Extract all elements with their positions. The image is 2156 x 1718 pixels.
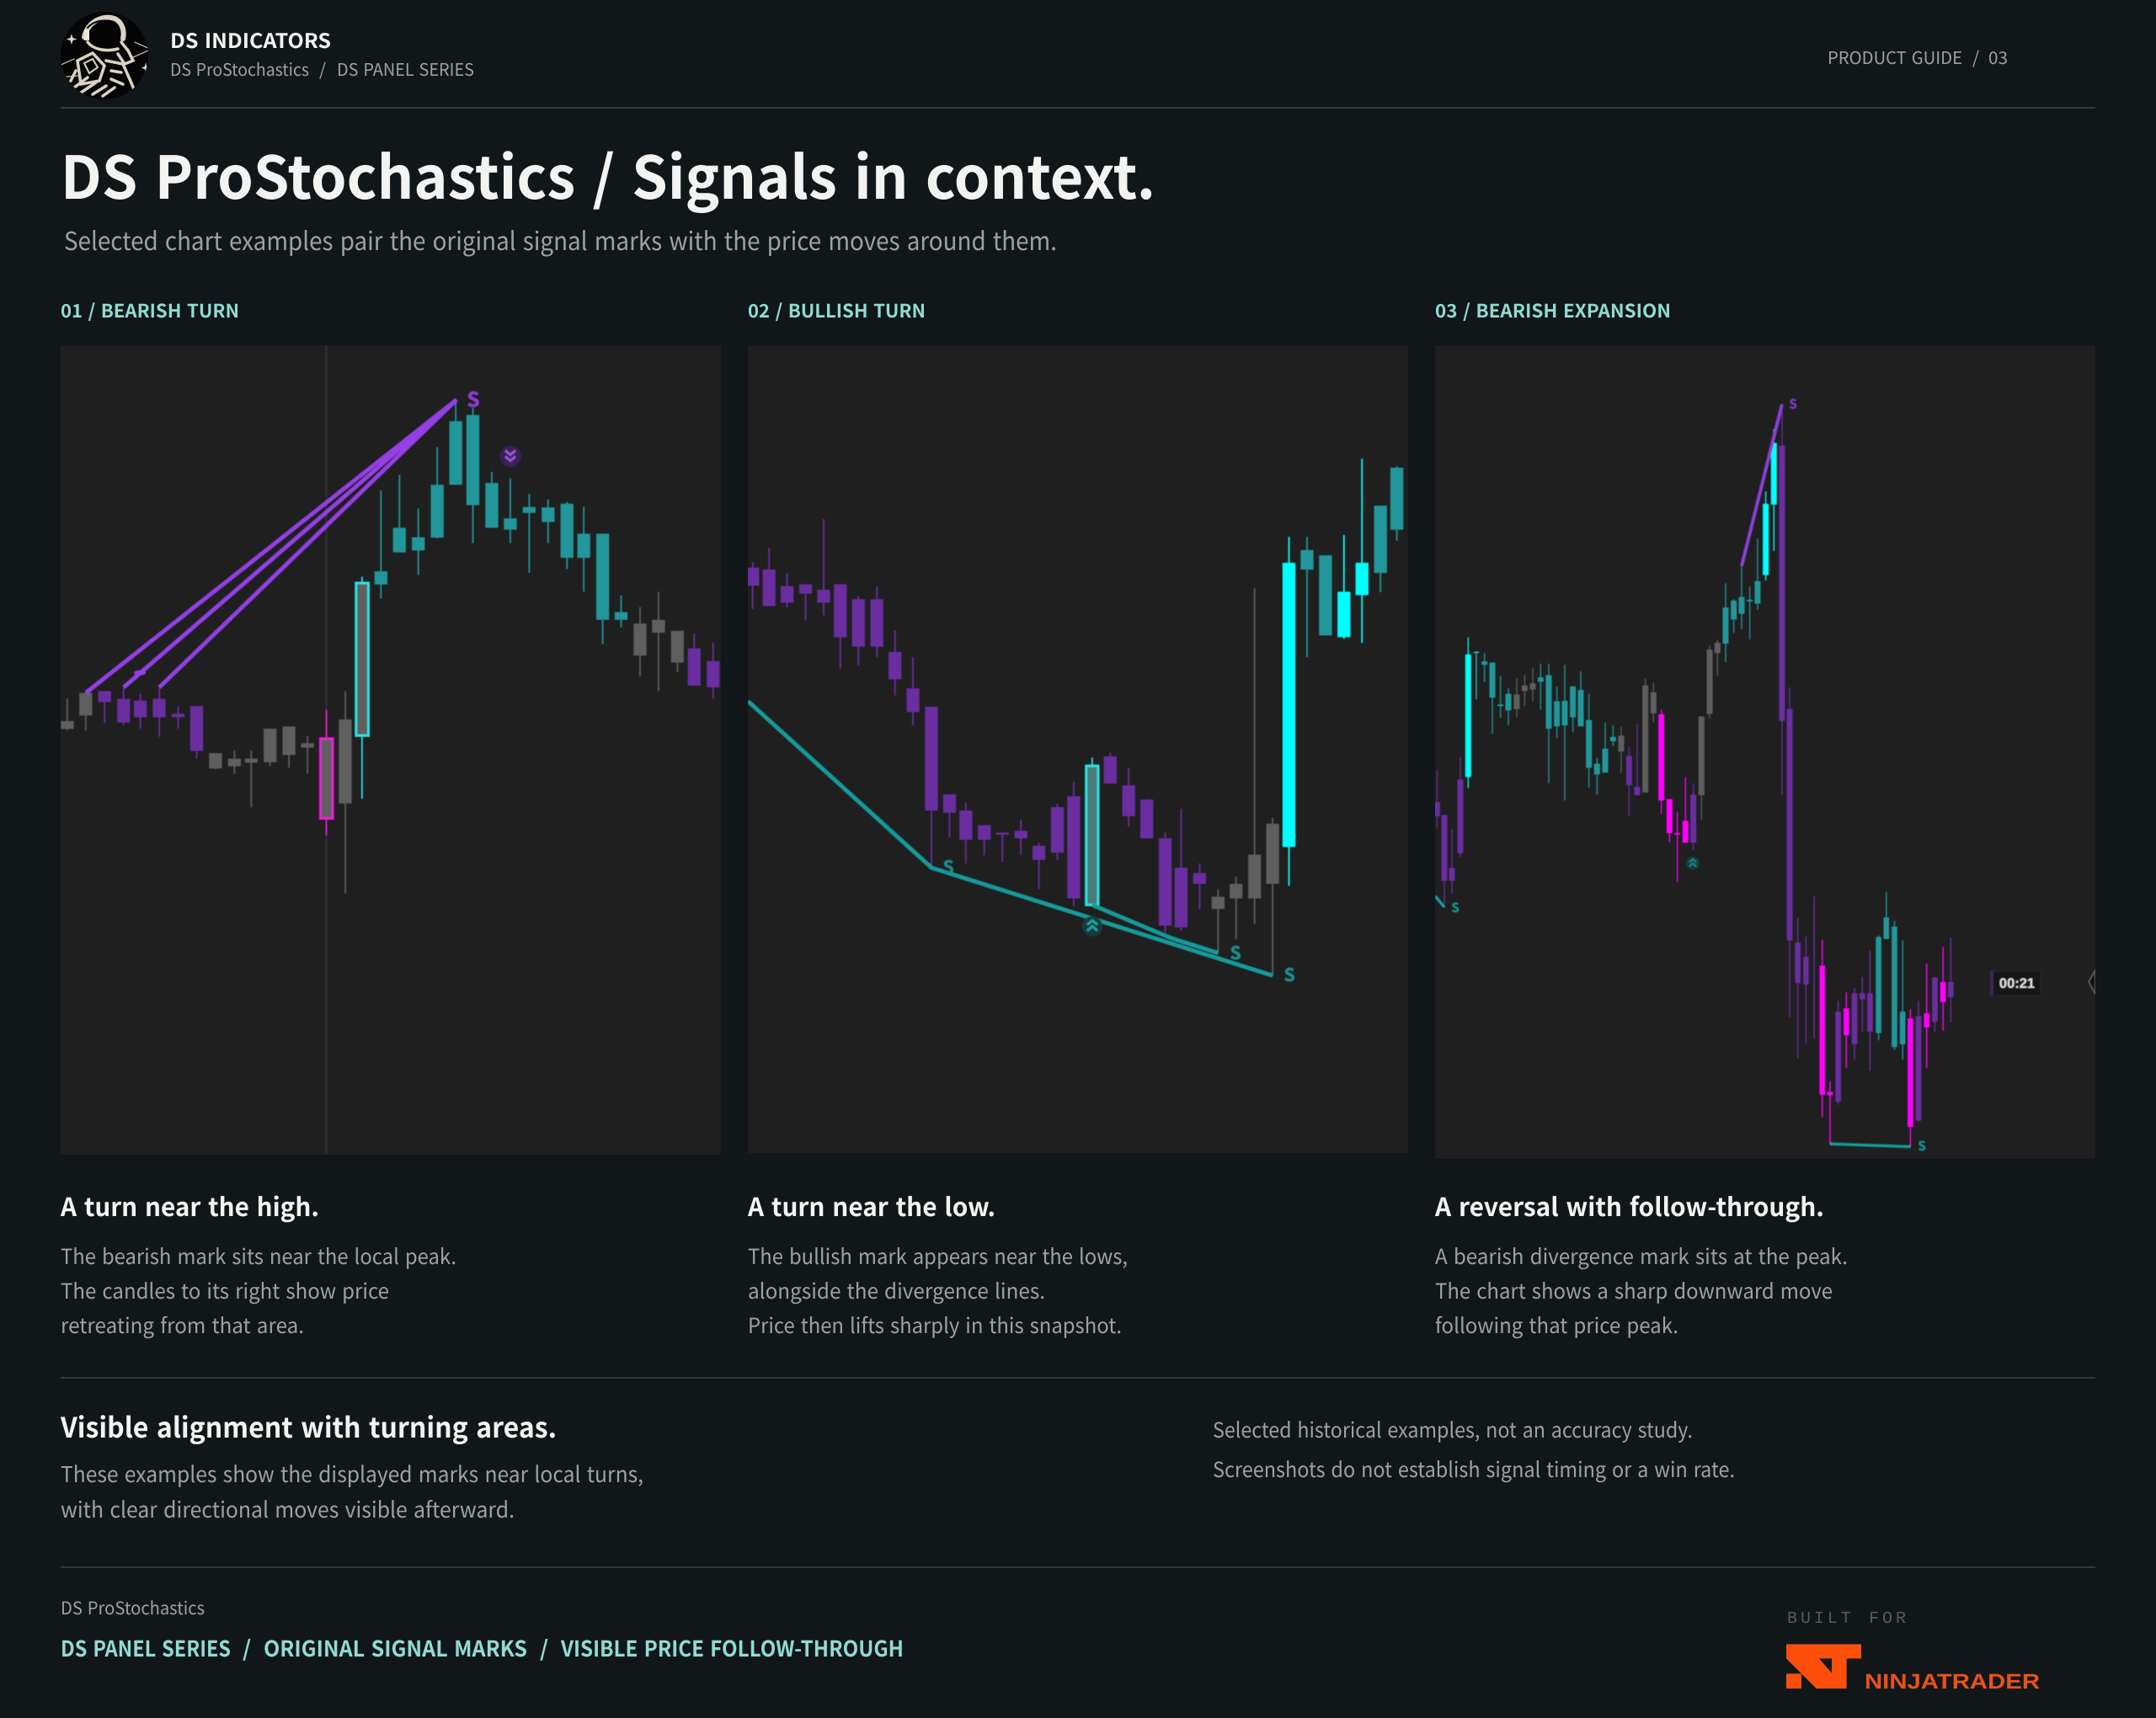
cyan candles — [1468, 430, 1774, 788]
teal candles — [1476, 538, 1758, 801]
chart 2: bullish turn candles — [748, 345, 1408, 1153]
caption 01 body: retreating from that area. — [61, 1310, 304, 1340]
chart 3: bearish expansion candles — [1435, 345, 2095, 1159]
cyan candles — [1289, 459, 1362, 886]
caption 01 body — [61, 1240, 456, 1340]
highlighted candles — [320, 577, 369, 835]
brand subtitle — [170, 56, 474, 81]
page tag: / — [1972, 44, 1979, 69]
disclaimer — [1213, 1414, 1735, 1484]
signal mark S teal bottom: S — [1918, 1137, 1926, 1155]
gray candles — [67, 592, 677, 894]
icon: bullish chevrons — [1082, 916, 1102, 936]
header: brand block — [57, 12, 474, 99]
icon: astronaut avatar — [57, 12, 150, 99]
disclaimer: Selected historical examples, not an accuracy study. — [1213, 1414, 1693, 1444]
built for label: BUILT FOR — [1787, 1609, 1906, 1629]
caption 02 body: Price then lifts sharply in this snapshot. — [748, 1310, 1122, 1340]
caption 01 body: The candles to its right show price — [61, 1275, 389, 1305]
gray candles — [1517, 640, 1717, 820]
lower teal candles — [1879, 892, 1903, 1059]
page tag: PRODUCT GUIDE — [1828, 44, 1962, 69]
caption 02 heading: A turn near the low. — [747, 1187, 995, 1224]
panel label 01: 01 / BEARISH TURN — [61, 296, 239, 323]
page tag: 03 — [1988, 44, 2008, 69]
highlighted candle — [1086, 758, 1098, 905]
brand subtitle: DS PANEL SERIES — [337, 56, 474, 81]
icon: bearish chevrons — [499, 446, 521, 467]
signal mark S teal left: S — [1451, 899, 1460, 916]
summary text — [61, 1458, 643, 1524]
countdown badge: 00:21 — [1999, 976, 2035, 991]
signal mark S 2: S — [1230, 940, 1241, 965]
title: DS ProStochastics / Signals in context. — [61, 131, 1155, 216]
caption 03 body: The chart shows a sharp downward move — [1435, 1275, 1833, 1305]
caption 02 body: alongside the divergence lines. — [748, 1275, 1045, 1305]
caption 03 heading: A reversal with follow-through. — [1434, 1187, 1824, 1224]
disclaimer: Screenshots do not establish signal timing or a win rate. — [1213, 1454, 1735, 1484]
caption 03 body: following that price peak. — [1435, 1310, 1678, 1340]
teal candles — [1307, 467, 1397, 657]
caption 02 — [747, 1187, 1128, 1340]
icon: small bullish chevrons — [1686, 856, 1700, 870]
footer tags: ORIGINAL SIGNAL MARKS — [264, 1632, 527, 1663]
brand name: DS INDICATORS — [170, 24, 331, 54]
signal mark S 1: S — [942, 854, 954, 879]
icon: NT mark — [1786, 1644, 1861, 1689]
purple candles — [104, 633, 713, 759]
summary text: These examples show the displayed marks near local turns, — [61, 1458, 643, 1489]
teal candles — [381, 400, 622, 644]
signal mark S 3: S — [1283, 962, 1295, 987]
caption 01 heading: A turn near the high. — [60, 1187, 319, 1224]
peak divergence line — [1742, 404, 1782, 566]
chart 1: bearish turn candles — [61, 345, 721, 1155]
caption 03 — [1434, 1187, 1848, 1340]
lower purple candles — [1798, 896, 1951, 1122]
caption 03 body: A bearish divergence mark sits at the peak. — [1435, 1240, 1848, 1271]
countdown badge — [1990, 971, 2041, 995]
icon: edge arrow — [2089, 970, 2095, 994]
caption 02 body: The bullish mark appears near the lows, — [748, 1240, 1128, 1271]
subtitle: Selected chart examples pair the original signal marks with the price moves around them. — [64, 221, 1057, 258]
divergence lines — [748, 702, 1273, 975]
brand subtitle: / — [319, 56, 326, 81]
footer tags: / — [243, 1632, 251, 1663]
NinjaTrader logo — [1786, 1644, 2040, 1694]
magenta candles — [1662, 709, 1685, 882]
divergence lines — [86, 400, 456, 693]
footer tags — [61, 1632, 904, 1663]
signal mark S purple: S — [1789, 395, 1797, 413]
summary heading: Visible alignment with turning areas. — [60, 1406, 557, 1446]
panel label 02: 02 / BULLISH TURN — [748, 296, 926, 323]
caption 02 body — [748, 1240, 1128, 1340]
purple candles — [1437, 404, 1790, 1017]
gray candles — [1218, 589, 1273, 975]
footer tags: VISIBLE PRICE FOLLOW-THROUGH — [560, 1632, 904, 1663]
caption 01 — [60, 1187, 456, 1340]
lower magenta candles — [1822, 940, 1943, 1147]
purple candles — [753, 519, 1199, 932]
summary text: with clear directional moves visible afterward. — [61, 1493, 515, 1524]
footer product name: DS ProStochastics — [61, 1595, 205, 1620]
brand subtitle: DS ProStochastics — [170, 56, 309, 81]
footer tags: DS PANEL SERIES — [61, 1632, 231, 1663]
caption 01 body: The bearish mark sits near the local peak. — [61, 1240, 456, 1271]
lower divergence lines — [1435, 896, 1910, 1147]
summary block — [60, 1406, 643, 1524]
wordmark: NINJATRADER — [1865, 1670, 2040, 1694]
panel label 03: 03 / BEARISH EXPANSION — [1435, 296, 1671, 323]
caption 03 body — [1435, 1240, 1848, 1340]
signal mark S: S — [467, 383, 480, 413]
footer tags: / — [540, 1632, 548, 1663]
